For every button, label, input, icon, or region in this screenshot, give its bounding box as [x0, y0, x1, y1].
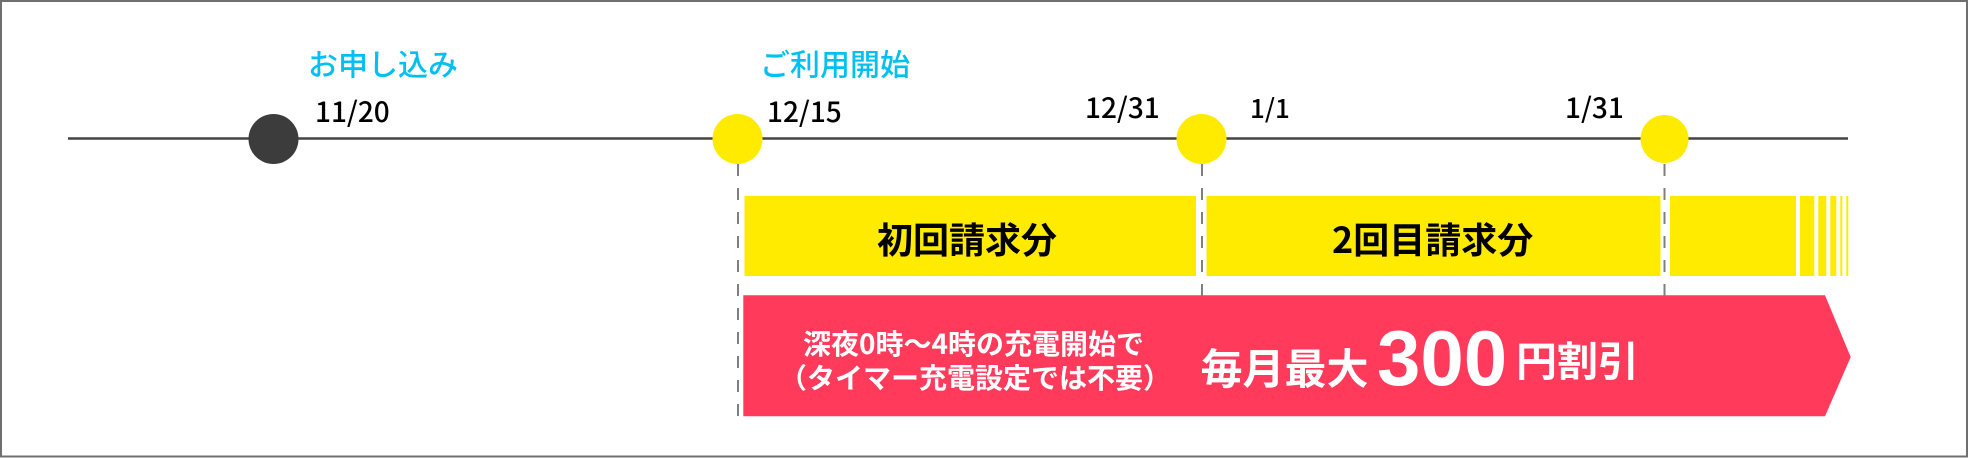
bar label: first billing: 初回請求分: [877, 212, 1057, 264]
condition text: （タイマー充電設定では不要）: [779, 357, 1171, 397]
discount text: [1200, 314, 1639, 402]
discount text: 円割引: [1516, 328, 1639, 388]
marker: end of second period: [1640, 115, 1688, 163]
timeline axis: [68, 137, 1848, 140]
bar label: second billing: 2回目請求分: [1332, 212, 1533, 264]
discount text: 300: [1377, 314, 1507, 402]
marker: end of first period: [1176, 114, 1226, 164]
bar: second billing: [1206, 196, 1660, 276]
label: start of use: ご利用開始: [760, 40, 910, 84]
discount text: 毎月最大: [1200, 336, 1369, 397]
bar: first billing: [744, 196, 1196, 276]
arrow: discount banner: [743, 295, 1851, 416]
label: application: お申し込み: [308, 40, 458, 84]
date: 1/1: 1/1: [1250, 89, 1290, 126]
date: 12/15: 12/15: [767, 91, 842, 131]
bar: following billing, fading stripes: [1670, 196, 1848, 276]
date: 11/20: 11/20: [315, 91, 390, 131]
condition text: 深夜0時～4時の充電開始で: [803, 323, 1144, 363]
date: 1/31: 1/31: [1565, 87, 1624, 127]
date: 12/31: 12/31: [1085, 87, 1160, 127]
condition text: [779, 323, 1171, 397]
marker: start of use: [712, 114, 762, 164]
dashed guides: [738, 164, 1664, 417]
marker: application date: [248, 114, 298, 164]
